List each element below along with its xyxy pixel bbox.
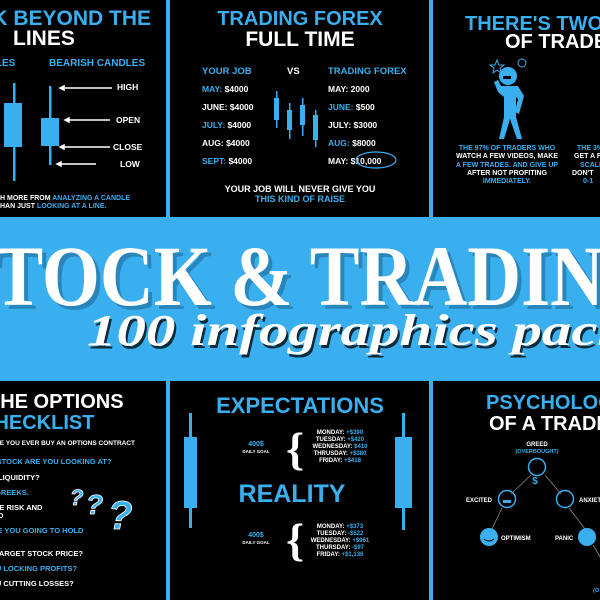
greed: (OVERBOUGHT) xyxy=(515,449,559,455)
excited: EXCITED xyxy=(466,498,493,504)
optimism xyxy=(480,528,531,546)
column headers: VS xyxy=(287,66,300,77)
trading forex column: MAY: $10,000 xyxy=(328,156,382,166)
caption xyxy=(225,184,375,204)
caption: HAN JUST LOOKING AT A LINE. xyxy=(0,203,106,210)
goal 2 xyxy=(242,532,270,545)
subheadings: BEARISH CANDLES xyxy=(49,58,145,69)
expectations list: WEDNESDAY: $410 xyxy=(312,444,368,450)
heading xyxy=(465,13,600,53)
greed: $ xyxy=(532,476,538,487)
your job column: MAY: $4000 xyxy=(202,84,249,94)
bearish candle xyxy=(41,86,59,165)
subtitle: 100 infographics pack xyxy=(89,309,600,358)
greed xyxy=(515,442,559,487)
expectations list: THRUSDAY: +$380 xyxy=(314,451,367,457)
your job column: SEPT: $4000 xyxy=(202,156,252,166)
reality list: THURSDAY: -$97 xyxy=(316,545,365,551)
text: 97%: AFTER NOT PROFITING xyxy=(467,170,548,177)
goal 2: DAILY GOAL xyxy=(242,540,270,545)
your job column xyxy=(202,84,254,166)
text: 3% xyxy=(572,145,600,185)
checklist xyxy=(0,440,135,588)
text: 3%: DON'T xyxy=(572,170,594,177)
left candle xyxy=(184,413,197,528)
reality list xyxy=(311,524,370,558)
panel: psychology of a trader xyxy=(433,381,600,600)
panic: PANIC xyxy=(555,536,574,542)
expectations list: TUESDAY: +$420 xyxy=(316,437,365,443)
caption: H MORE FROM ANALYZING A CANDLE xyxy=(0,195,130,202)
text: 97% xyxy=(456,145,558,185)
caption: THIS KIND OF RAISE xyxy=(255,194,345,204)
column headers: TRADING FOREX xyxy=(328,66,407,77)
column headers xyxy=(202,66,407,77)
arrows and labels: LOW xyxy=(120,159,141,169)
banner title xyxy=(0,228,600,358)
text: 97%: A FEW TRADES. AND GIVE UP xyxy=(456,162,558,169)
caption xyxy=(0,195,130,210)
right candle xyxy=(395,413,412,530)
text: 97%: IMMEDIATELY. xyxy=(483,178,531,185)
panel: psychology of a trader: (O xyxy=(593,588,600,594)
trading forex column: MAY: 2000 xyxy=(328,84,370,94)
brace 1: { xyxy=(286,423,304,474)
your job column: JULY: $4000 xyxy=(202,120,251,130)
heading: TRADING FOREX xyxy=(217,8,383,30)
arrows and labels: CLOSE xyxy=(113,142,143,152)
text: 3%: 0-1 xyxy=(583,178,593,185)
goal 1: 400$ xyxy=(248,441,264,448)
anxiety xyxy=(556,490,600,508)
panel: options checklist xyxy=(0,381,166,600)
arrows and labels: OPEN xyxy=(116,115,140,125)
your job column: AUG: $4000 xyxy=(202,138,250,148)
caption: YOUR JOB WILL NEVER GIVE YOU xyxy=(225,184,375,194)
panel: look beyond the lines xyxy=(0,0,166,217)
cycle lines xyxy=(492,475,600,560)
brace 2: { xyxy=(286,514,304,565)
expectations list: FRIDAY: +$418 xyxy=(319,458,362,464)
panel: two types of traders xyxy=(433,0,600,217)
expectations list: MONDAY: +$390 xyxy=(317,430,364,436)
your job column: JUNE: $4000 xyxy=(202,102,254,112)
icon: question marks: ? xyxy=(86,489,103,520)
trading forex column: JULY: $3000 xyxy=(328,120,377,130)
reality list: FRIDAY: +$1,136 xyxy=(317,552,364,558)
optimism: OPTIMISM xyxy=(501,536,531,542)
trading forex column: AUG: $8000 xyxy=(328,138,376,148)
reality list: WEDNESDAY: +$961 xyxy=(311,538,370,544)
reality list: MONDAY: +$373 xyxy=(317,524,364,530)
arrows and labels: HIGH xyxy=(117,82,138,92)
subtitle: 100 infographics pack xyxy=(87,306,600,355)
icon: question marks: ? xyxy=(108,494,132,538)
greed: GREED xyxy=(526,442,548,448)
heading xyxy=(0,391,124,434)
icon: question marks xyxy=(70,485,132,538)
goal 1 xyxy=(242,441,270,454)
goal 2: 400$ xyxy=(248,532,264,539)
heading xyxy=(217,8,383,51)
text: 97%: THE 97% OF TRADERS WHO xyxy=(459,145,556,152)
icon: question marks: ? xyxy=(70,485,83,510)
goal 1: DAILY GOAL xyxy=(242,449,270,454)
expectations list xyxy=(312,430,368,464)
heading reality: REALITY xyxy=(239,480,346,508)
mini candles xyxy=(274,91,318,147)
panel: expectations vs reality xyxy=(170,381,429,600)
heading: look beyond the lines xyxy=(0,7,151,50)
heading: FULL TIME xyxy=(245,28,355,51)
column headers: YOUR JOB xyxy=(202,66,252,77)
trading forex column xyxy=(328,84,382,166)
bullish candle xyxy=(4,83,22,181)
excited xyxy=(466,490,516,508)
subheadings xyxy=(0,58,145,69)
heading xyxy=(486,392,600,435)
heading: look beyond the lines: LINES xyxy=(13,27,75,50)
text: 97%: WATCH A FEW VIDEOS, MAKE xyxy=(456,153,558,160)
trading forex column: JUNE: $500 xyxy=(328,102,375,112)
heading expectations: EXPECTATIONS xyxy=(216,393,384,418)
icon: frustrated trader xyxy=(490,59,526,139)
panel: trading forex full time xyxy=(170,0,429,217)
highlight ellipse xyxy=(356,152,396,168)
reality list: TUESDAY: -$522 xyxy=(317,531,364,537)
arrows and labels xyxy=(57,82,143,169)
panic xyxy=(555,528,596,546)
